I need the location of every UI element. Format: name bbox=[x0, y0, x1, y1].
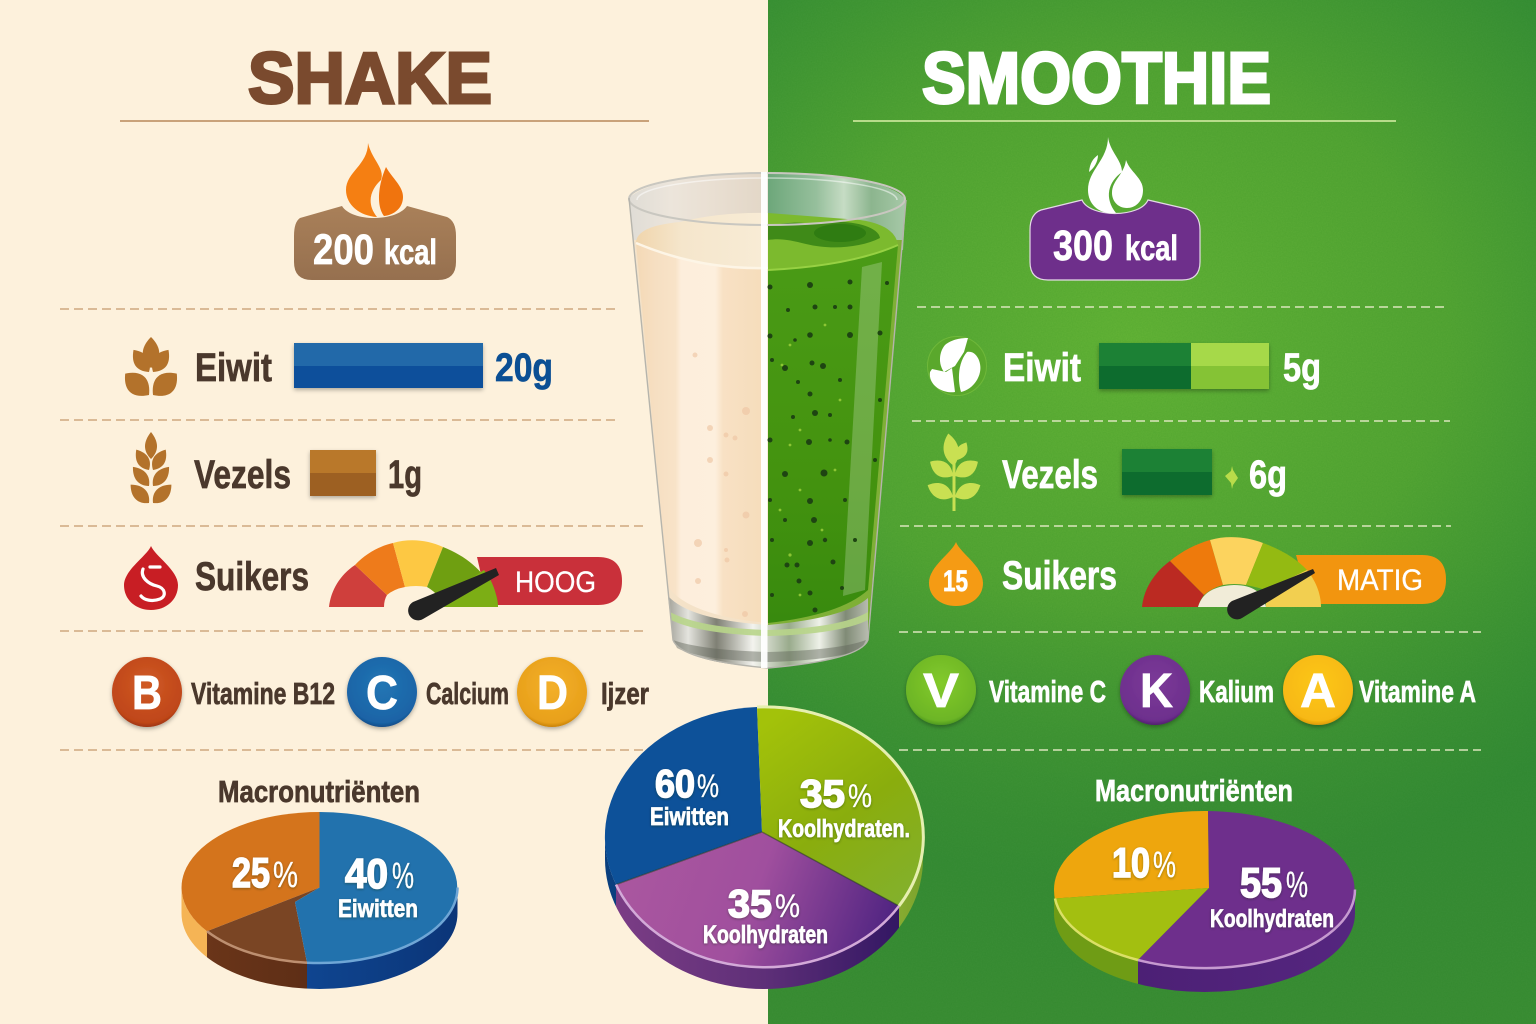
glass upper right bbox=[768, 172, 906, 640]
vitamins: shake: Ijzer bbox=[601, 676, 649, 711]
row: suikers bbox=[124, 540, 622, 620]
gauge: moderate sugar bbox=[1142, 537, 1321, 619]
pie chart: center comparison bbox=[605, 707, 923, 989]
icon: grain leaves bbox=[118, 337, 184, 403]
title: SHAKE: SHAKE bbox=[248, 39, 492, 119]
badge: K bbox=[1120, 655, 1190, 725]
calorie badge: 300 kcal bbox=[1030, 137, 1200, 280]
row: eiwit: 20g bbox=[495, 346, 553, 390]
badge: A bbox=[1283, 655, 1353, 725]
row: vezels bbox=[126, 432, 422, 508]
status pill: HOOG bbox=[477, 557, 622, 605]
badge: K: K bbox=[1140, 665, 1173, 718]
pie chart: smoothie macros: % bbox=[1286, 864, 1308, 905]
vitamins: shake: Calcium bbox=[426, 676, 509, 711]
row: vezels: 1g bbox=[388, 453, 422, 497]
row: suikers: Suikers bbox=[195, 555, 309, 599]
calorie badge: 200 kcal bbox=[294, 143, 456, 280]
row: vezels: Vezels bbox=[194, 453, 291, 497]
pie chart: center comparison: Koolhydraten bbox=[703, 921, 828, 949]
pie chart: smoothie macros: Koolhydraten bbox=[1210, 905, 1334, 933]
row: eiwit bbox=[118, 337, 553, 403]
heading: macronutrienten smoothie: Macronutriënten bbox=[1095, 773, 1293, 808]
pie chart: shake macros: Eiwitten bbox=[338, 895, 418, 923]
pie chart: center comparison: % bbox=[775, 888, 800, 924]
pie chart: smoothie macros bbox=[1054, 811, 1355, 992]
pie chart: shake macros: % bbox=[273, 854, 298, 895]
badge: B bbox=[112, 657, 182, 727]
row: vezels: Vezels bbox=[1002, 453, 1098, 497]
row: vezels: 6g bbox=[1249, 453, 1287, 497]
row: eiwit bbox=[928, 336, 1321, 396]
badge: V bbox=[906, 655, 976, 725]
pie chart: shake macros: % bbox=[392, 855, 414, 896]
status pill: MATIG: MATIG bbox=[1337, 564, 1423, 597]
badge: V: V bbox=[923, 665, 959, 718]
vitamins: smoothie bbox=[906, 655, 1476, 725]
bar: 20g bbox=[294, 343, 483, 388]
icon: orange drop 15: 15 bbox=[943, 565, 968, 598]
row: vezels bbox=[924, 432, 1287, 511]
row: eiwit: Eiwit bbox=[1003, 346, 1081, 390]
needle bbox=[1227, 569, 1315, 619]
pie chart: shake macros: 25 bbox=[232, 849, 270, 896]
glass base bbox=[668, 596, 868, 668]
status pill: MATIG bbox=[1296, 555, 1446, 604]
bar: 5g bbox=[1099, 343, 1269, 389]
badge: B: B bbox=[132, 667, 162, 720]
seeds bbox=[768, 280, 889, 612]
row: eiwit: 5g bbox=[1283, 346, 1321, 390]
row: eiwit: Eiwit bbox=[195, 346, 272, 390]
vitamins: smoothie: Kalium bbox=[1199, 674, 1274, 709]
badge: A: A bbox=[1300, 665, 1336, 718]
row: suikers bbox=[929, 537, 1446, 619]
pie chart: center comparison: 35 bbox=[800, 773, 845, 816]
glass rim bbox=[629, 173, 906, 668]
bar: 6g bbox=[1122, 449, 1212, 495]
background: green smoothie side bbox=[768, 0, 1536, 1024]
icon: orange drop 15 bbox=[929, 542, 983, 606]
pie chart: smoothie macros: % bbox=[1153, 844, 1176, 885]
icon: white leaves bbox=[928, 336, 986, 396]
vitamins: smoothie: Vitamine A bbox=[1359, 674, 1476, 709]
row: suikers: Suikers bbox=[1002, 554, 1117, 598]
pie chart: shake macros bbox=[182, 812, 458, 989]
icon: flame bbox=[346, 143, 403, 217]
divider line bbox=[761, 172, 768, 668]
icon: sprig bbox=[924, 432, 984, 511]
pie chart: smoothie macros: 55 bbox=[1240, 859, 1282, 906]
icon: drops bbox=[1088, 137, 1143, 213]
title: SMOOTHIE: SMOOTHIE bbox=[922, 39, 1271, 119]
liquid: shake bbox=[636, 213, 768, 623]
calorie badge: 200 kcal: kcal bbox=[384, 233, 437, 272]
background: cream shake side bbox=[0, 0, 768, 1024]
status pill: HOOG: HOOG bbox=[515, 566, 596, 599]
icon: sugar drop bbox=[124, 546, 178, 610]
bar: 1g bbox=[310, 450, 376, 496]
badge: C: C bbox=[366, 667, 398, 720]
heading: macronutrienten shake: Macronutriënten bbox=[218, 774, 420, 809]
pie chart: center comparison: % bbox=[697, 768, 719, 804]
badge: D: D bbox=[537, 667, 568, 720]
pie chart: smoothie macros: 10 bbox=[1112, 839, 1150, 886]
calorie badge: 300 kcal: kcal bbox=[1125, 229, 1178, 268]
pie chart: shake macros: 40 bbox=[345, 850, 388, 897]
calorie badge: 300 kcal: 300 bbox=[1053, 222, 1113, 270]
pie chart: center comparison: % bbox=[848, 778, 872, 814]
liquid: smoothie bbox=[768, 213, 898, 623]
illustration: glass half shake half smoothie bbox=[629, 172, 906, 668]
needle bbox=[408, 568, 499, 620]
vitamins: shake bbox=[112, 657, 649, 727]
pie chart: center comparison: 60 bbox=[655, 763, 695, 806]
glass upper left bbox=[629, 172, 768, 640]
pie chart: center comparison: Eiwitten bbox=[650, 803, 729, 831]
panel: smoothie bbox=[853, 39, 1481, 992]
gauge: high sugar bbox=[329, 540, 499, 620]
calorie badge: 200 kcal: 200 bbox=[313, 226, 374, 274]
vitamins: smoothie: Vitamine C bbox=[989, 674, 1106, 709]
badge: C bbox=[347, 657, 417, 727]
badge: D bbox=[517, 657, 587, 727]
pie chart: center comparison: 35 bbox=[728, 883, 772, 926]
pie chart: center comparison: Koolhydraten. bbox=[778, 815, 910, 843]
vitamins: shake: Vitamine B12 bbox=[191, 676, 335, 711]
icon: wheat bbox=[126, 432, 176, 508]
panel: shake bbox=[60, 39, 649, 989]
